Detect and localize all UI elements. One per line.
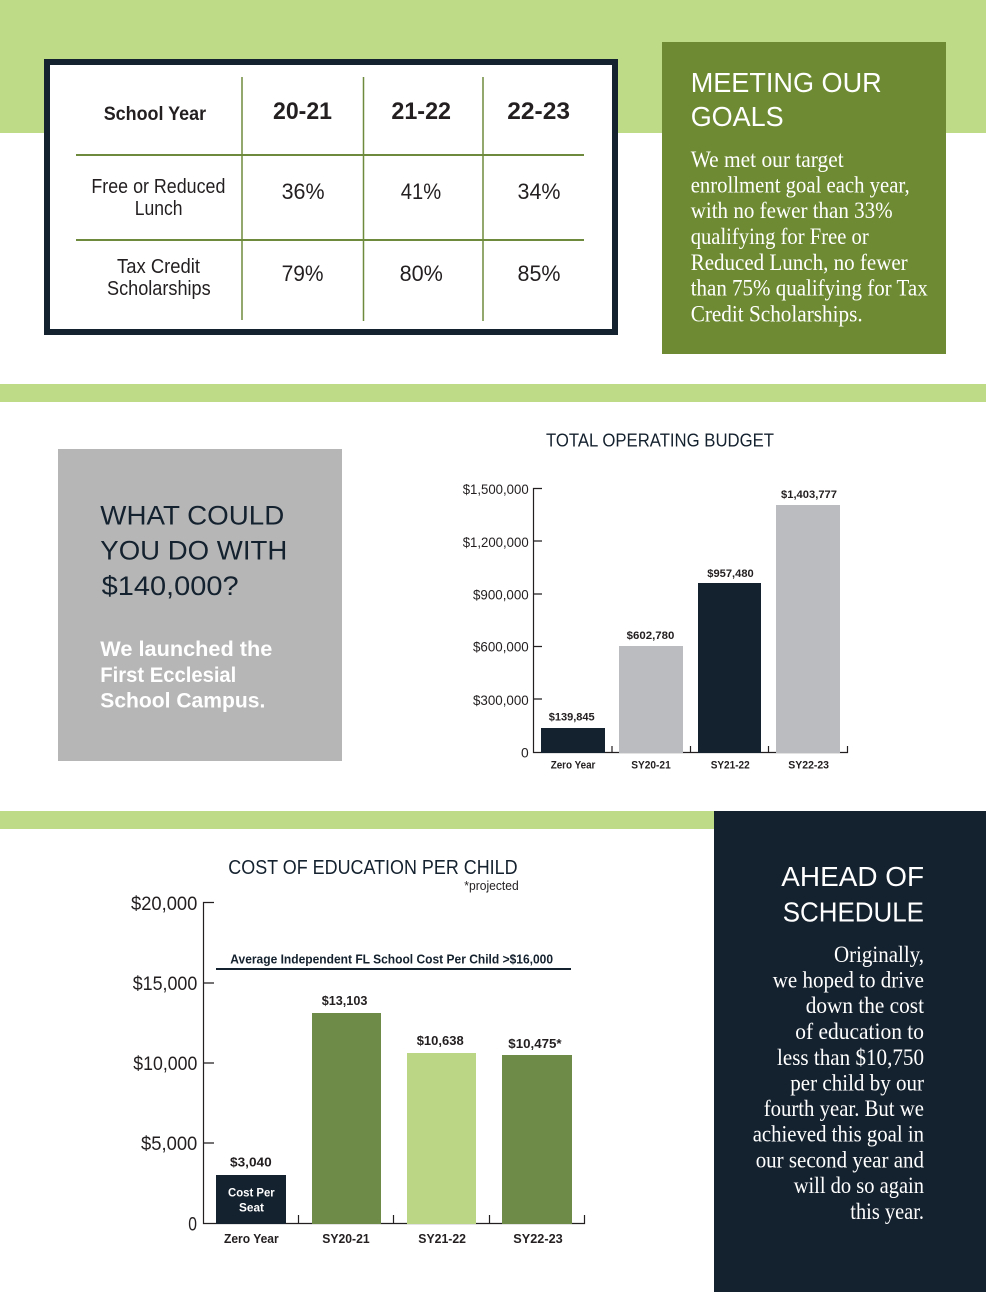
bar value labels: $3,040 — [230, 1155, 272, 1170]
body text: our second year and — [756, 1148, 924, 1173]
body text: Reduced Lunch, no fewer — [691, 250, 908, 275]
body text: enrollment goal each year, — [691, 172, 910, 198]
x axis labels: Zero Year — [224, 1231, 279, 1246]
y axis labels: $300,000 — [473, 692, 529, 708]
table row: free or reduced lunch — [91, 176, 561, 220]
table row: tax credit scholarships: 80% — [400, 261, 443, 286]
body text: Credit Scholarships. — [691, 302, 863, 326]
y axis labels — [131, 894, 197, 1236]
table row: tax credit scholarships: 79% — [282, 261, 324, 286]
heading: WHAT COULD — [100, 501, 284, 531]
y axis labels: $900,000 — [473, 587, 529, 603]
x axis labels: SY20-21 — [631, 760, 671, 772]
projected footnote: *projected — [464, 879, 519, 893]
bar value labels: $13,103 — [322, 993, 367, 1008]
bar value labels: $139,845 — [549, 712, 595, 724]
table frame — [47, 62, 615, 332]
body text: qualifying for Free or — [691, 224, 869, 249]
table row: tax credit scholarships: 85% — [518, 261, 560, 286]
bars — [216, 1013, 572, 1224]
body text: achieved this goal in — [753, 1122, 924, 1147]
subtext: We launched the — [100, 638, 272, 661]
table header row: School Year — [104, 104, 207, 125]
chart: cost of education per child — [131, 857, 584, 1246]
heading — [691, 67, 882, 132]
y axis labels: 0 — [521, 744, 529, 760]
table row: free or reduced lunch: Free or Reduced — [91, 176, 225, 198]
cost per seat label: Seat — [239, 1201, 264, 1215]
y axis labels: 0 — [188, 1215, 197, 1236]
heading: MEETING OUR — [691, 67, 882, 98]
bar value labels: $10,475* — [508, 1036, 563, 1051]
bar value labels: $1,403,777 — [781, 489, 837, 501]
y axis labels: $20,000 — [131, 894, 197, 915]
cost per seat label: Cost Per — [228, 1186, 275, 1200]
body text: Originally, — [834, 942, 924, 967]
panel: meeting our goals — [662, 42, 946, 354]
body text: We met our target — [691, 147, 844, 172]
table row: free or reduced lunch: Lunch — [135, 198, 182, 220]
body text: with no fewer than 33% — [691, 198, 893, 223]
axes — [534, 488, 848, 752]
heading: GOALS — [691, 101, 784, 132]
subtext: School Campus. — [100, 690, 265, 713]
bar value labels: $10,638 — [417, 1033, 464, 1048]
y axis labels: $600,000 — [473, 639, 529, 655]
y axis labels: $15,000 — [133, 974, 197, 995]
heading — [781, 861, 924, 928]
x axis labels: SY22-23 — [788, 760, 829, 772]
axes — [204, 902, 584, 1224]
table header row — [104, 98, 570, 125]
x axis labels: Zero Year — [551, 760, 596, 772]
body text: fourth year. But we — [764, 1096, 924, 1121]
y axis labels: $1,500,000 — [463, 481, 529, 497]
panel background — [58, 449, 342, 761]
green divider band 2 — [0, 811, 714, 829]
y axis labels: $1,200,000 — [463, 534, 529, 550]
body text: of education to — [795, 1019, 924, 1044]
top green banner — [0, 0, 986, 133]
table header row: 20-21 — [273, 98, 332, 125]
table row: free or reduced lunch: 36% — [282, 179, 325, 204]
body text — [753, 942, 925, 1224]
panel: enrollment table — [47, 62, 615, 332]
chart title: COST OF EDUCATION PER CHILD — [228, 857, 518, 879]
x axis labels — [551, 760, 829, 772]
table row: free or reduced lunch: 41% — [401, 179, 441, 204]
benchmark label and line: Average Independent FL School Cost Per Child >$16,000 — [230, 952, 553, 966]
heading: YOU DO WITH — [100, 536, 287, 566]
table row: tax credit scholarships: Scholarships — [107, 278, 211, 300]
green divider band 1 — [0, 384, 986, 402]
y axis labels — [463, 481, 529, 760]
body text: less than $10,750 — [777, 1045, 924, 1070]
subtext: First Ecclesial — [100, 664, 236, 687]
bar value labels — [230, 993, 563, 1170]
bar value labels — [549, 489, 837, 724]
table row: tax credit scholarships — [107, 256, 560, 300]
bar value labels: $602,780 — [627, 630, 674, 642]
heading: $140,000? — [102, 571, 239, 601]
body text — [691, 147, 928, 326]
body text: will do so again — [794, 1173, 924, 1198]
chart title: TOTAL OPERATING BUDGET — [546, 430, 774, 451]
panel: ahead of schedule — [714, 811, 986, 1292]
y axis labels: $5,000 — [141, 1134, 197, 1155]
x axis labels — [224, 1231, 563, 1246]
table header row: 22-23 — [507, 98, 570, 125]
x axis labels: SY21-22 — [711, 760, 750, 772]
x axis labels: SY21-22 — [418, 1231, 466, 1246]
panel background — [662, 42, 946, 354]
bars — [541, 505, 840, 753]
body text: this year. — [850, 1199, 924, 1224]
table grid — [76, 77, 584, 321]
table row: free or reduced lunch: 34% — [518, 179, 560, 204]
panel: what could you do — [58, 449, 342, 761]
table row: tax credit scholarships: Tax Credit — [117, 256, 200, 278]
y axis labels: $10,000 — [133, 1054, 197, 1075]
cost per seat label — [228, 1186, 275, 1215]
body text: per child by our — [790, 1071, 924, 1096]
heading: SCHEDULE — [783, 897, 924, 928]
bar value labels: $957,480 — [707, 568, 754, 580]
body text: than 75% qualifying for Tax — [691, 276, 928, 300]
x axis labels: SY22-23 — [513, 1231, 563, 1246]
body text: down the cost — [806, 993, 925, 1018]
table header row: 21-22 — [391, 98, 451, 125]
heading: AHEAD OF — [781, 861, 924, 892]
subtext — [100, 638, 272, 713]
heading — [100, 501, 287, 601]
body text: we hoped to drive — [773, 968, 924, 993]
chart: total operating budget — [463, 430, 848, 772]
x axis labels: SY20-21 — [322, 1231, 370, 1246]
panel background — [714, 811, 986, 1292]
